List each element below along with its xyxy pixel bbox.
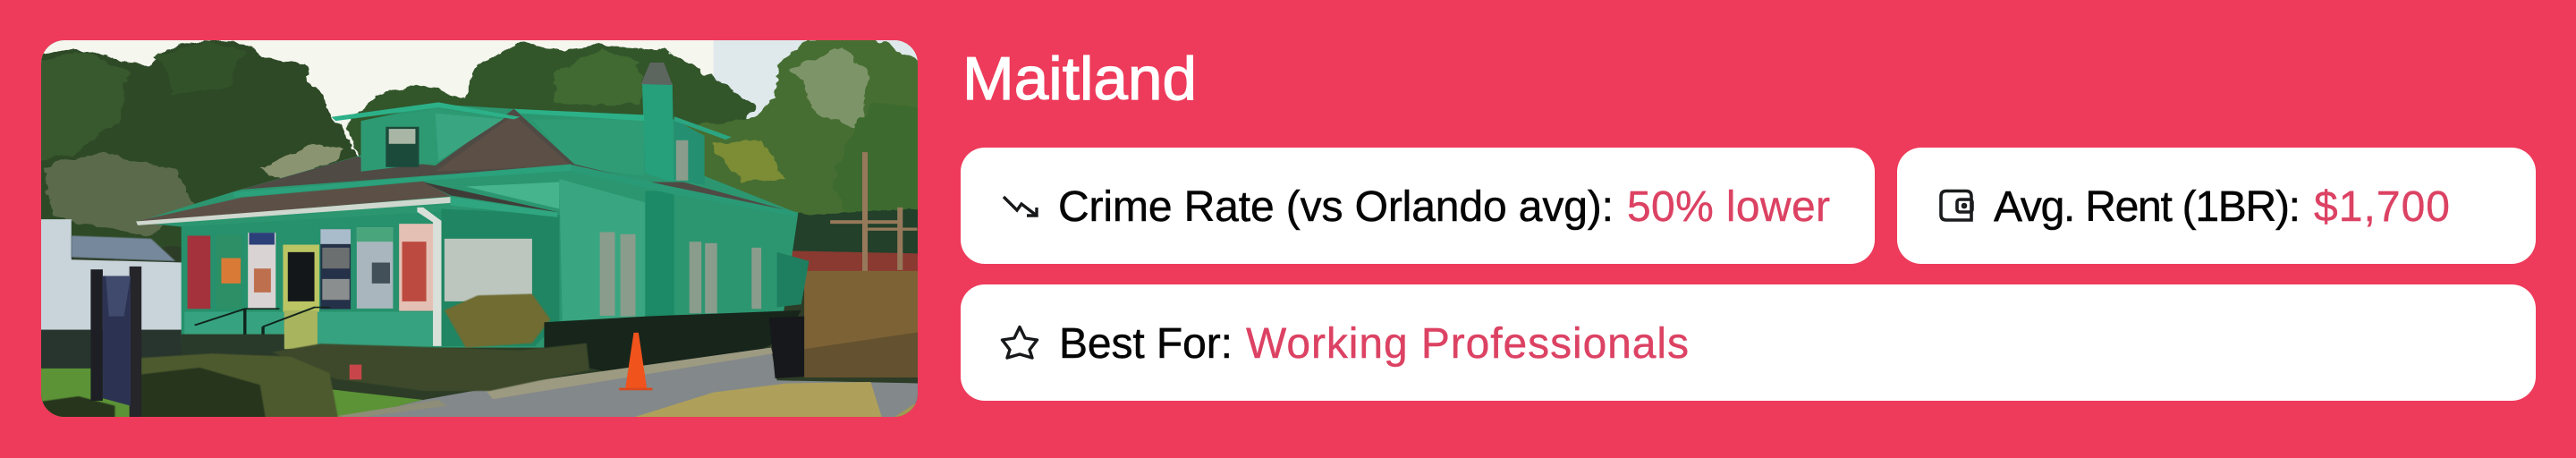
traffic cone [625, 333, 647, 389]
wooden fence [804, 271, 925, 376]
house: dormer window [386, 127, 419, 167]
red neighbouring roof [792, 250, 918, 271]
porch banners [188, 224, 434, 311]
house: front wall [559, 179, 647, 321]
sky right [714, 40, 918, 119]
house: roof eave trim [233, 164, 572, 198]
hedges front [42, 344, 589, 420]
utility pole [830, 152, 918, 272]
kerb [484, 348, 773, 399]
icon: trending down [1004, 197, 1037, 216]
card: average rent [1897, 148, 2536, 264]
label: crime rate: Crime Rate (vs Orlando avg): [1058, 183, 1614, 231]
front door [283, 245, 319, 312]
icon: star [1002, 327, 1038, 358]
yellow shrub [445, 294, 550, 348]
house: porch roof [136, 182, 451, 222]
label: best for: Best For: [1059, 320, 1233, 368]
value: $1,700: $1,700 [2314, 183, 2450, 231]
value: 50% lower: 50% lower [1627, 183, 1830, 231]
house: upper wall [532, 119, 644, 176]
lawn left [37, 369, 423, 418]
photo: green house with trees [24, 38, 931, 420]
wall mural [72, 236, 175, 261]
house: main roof [242, 109, 798, 213]
label: average rent: Avg. Rent (1BR): [1994, 183, 2301, 231]
icon: wallet [1941, 191, 1972, 220]
house: chimney [642, 83, 674, 182]
house: corner column [645, 191, 674, 317]
house silhouette [136, 105, 798, 348]
porch window [445, 239, 532, 301]
photo base [37, 38, 925, 420]
house: side wall [671, 199, 783, 317]
card: crime rate [961, 148, 1875, 264]
trash bin [769, 317, 804, 378]
porch downspout [417, 208, 441, 346]
house: porch base [184, 312, 436, 346]
dark hedge [544, 310, 801, 371]
value: working professionals: Working Professionals [1246, 320, 1689, 368]
no-parking sign [350, 365, 361, 379]
card: best for [961, 284, 2536, 401]
trees: right [685, 40, 918, 216]
side windows [600, 140, 761, 317]
infographic canvas [41, 40, 2536, 417]
house: right dormer [681, 123, 705, 138]
sky [41, 40, 918, 156]
house: rear bump [777, 252, 809, 308]
driveway [363, 347, 918, 417]
trees: centre [344, 42, 753, 185]
house: porch wall [181, 227, 182, 335]
trees: left [24, 38, 931, 257]
grass right [623, 382, 883, 420]
stair railings [193, 306, 331, 335]
lower left dark area [41, 329, 182, 347]
heading: Maitland [962, 45, 1197, 113]
left white wall [37, 219, 184, 335]
house: dormer [361, 118, 504, 172]
sign board [90, 267, 141, 420]
